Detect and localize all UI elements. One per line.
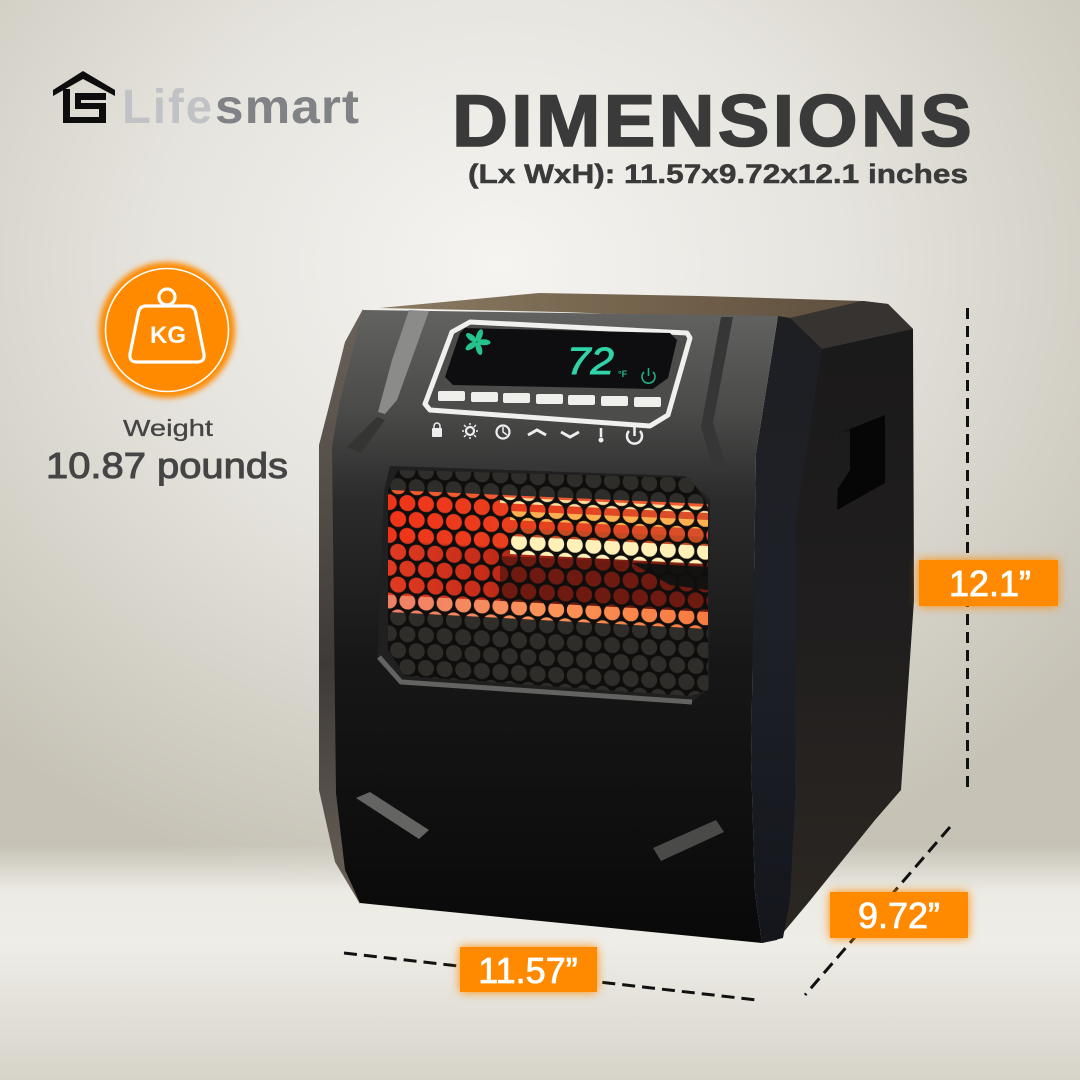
display — [445, 328, 677, 389]
logo wordmark: smart — [215, 81, 360, 134]
heater left bevel — [319, 309, 375, 904]
label: depth 9.72: 9.72” — [858, 895, 940, 936]
heater front face — [332, 310, 778, 943]
logo wordmark: Life — [122, 81, 214, 134]
label: width 11.57: 11.57” — [478, 950, 578, 991]
heater top surface — [380, 293, 880, 320]
icon: fan — [464, 328, 491, 356]
heater — [319, 293, 914, 943]
dimension line: depth — [805, 827, 950, 995]
control panel: °F — [618, 369, 628, 379]
heater front ridge — [751, 316, 822, 943]
handle cutout — [837, 415, 885, 510]
dimension line: height — [966, 308, 969, 790]
icon: house logo — [53, 71, 115, 123]
subtitle: dimensions: (Lx WxH): 11.57x9.72x12.1 inches — [468, 159, 968, 189]
weight text: Weight — [123, 415, 214, 441]
title: DIMENSIONS — [452, 81, 975, 162]
heating glow — [388, 490, 708, 629]
weight text: 10.87 pounds — [46, 445, 288, 486]
logo wordmark — [122, 81, 360, 134]
label: depth 9.72 — [830, 892, 968, 938]
label: height 12.1: 12.1” — [949, 563, 1031, 604]
label: height 12.1 — [919, 560, 1058, 606]
weight text — [46, 415, 288, 486]
label: width 11.57 — [460, 947, 597, 992]
face highlights — [347, 310, 733, 861]
icon: power green — [642, 368, 655, 383]
panel icons — [432, 423, 642, 444]
panel buttons — [438, 391, 661, 407]
icon: weight badge: KG — [150, 322, 186, 349]
dimension line: width — [344, 953, 757, 1000]
temperature readout: 72 — [567, 341, 614, 383]
infrared grille — [388, 470, 708, 696]
logo: Lifesmart — [53, 71, 360, 134]
icon: weight badge — [99, 262, 235, 398]
control panel — [425, 322, 690, 444]
heater side panel — [750, 301, 914, 943]
grille frame — [377, 466, 710, 704]
